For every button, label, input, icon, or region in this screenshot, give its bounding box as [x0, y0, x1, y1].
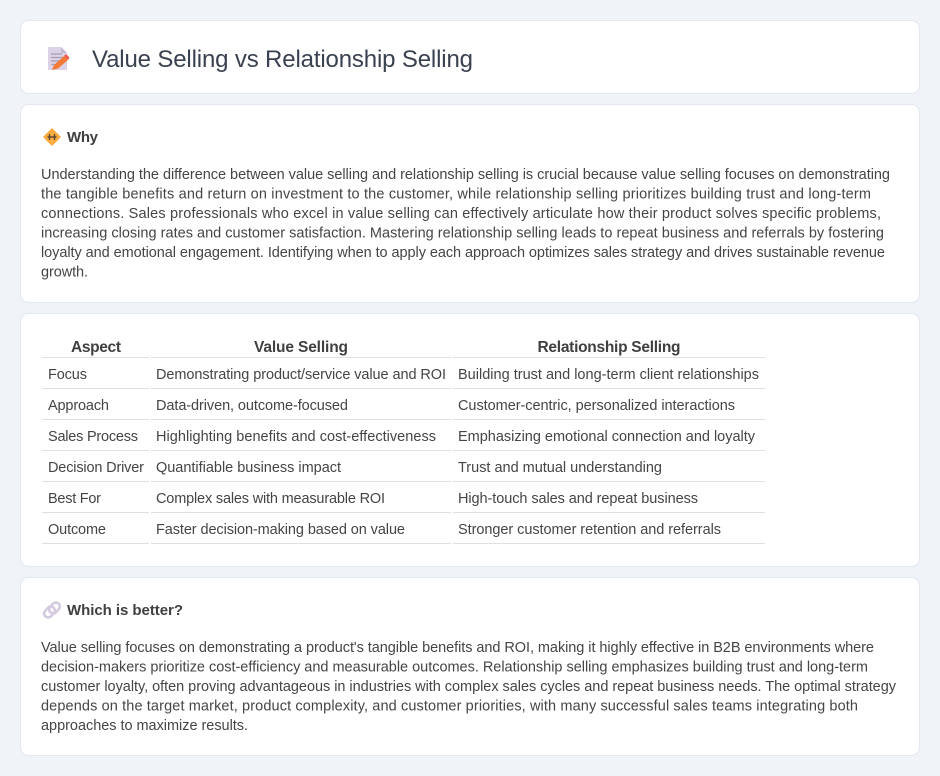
text block: why paragraph: the tangible benefits and return on investment to the customer, while relationship selling prioritizes building trust and long-term	[41, 186, 871, 202]
table row: focus	[48, 367, 759, 383]
table header	[71, 339, 680, 356]
heading: why: Why	[67, 129, 99, 146]
text block: which is better paragraph: approaches to maximize results.	[41, 718, 248, 734]
table row: best for: Best For	[48, 491, 101, 507]
text block: which is better paragraph	[41, 640, 897, 734]
panel: title header	[20, 20, 920, 94]
table header: Value Selling	[254, 339, 348, 356]
text block: which is better paragraph: customer loyalty, often proving advantageous in industries with complex sales cycles and repeat business needs. The optimal strategy	[41, 679, 897, 695]
table row: best for: Complex sales with measurable ROI	[156, 491, 385, 507]
panel: comparison table	[20, 314, 920, 566]
table row: sales process	[48, 429, 756, 445]
table row: approach	[48, 398, 735, 414]
text block: why paragraph: Understanding the difference between value selling and relationship selling is crucial because value selling focuses on demonstrating	[41, 167, 890, 183]
table row: focus: Focus	[48, 367, 87, 383]
text block: why paragraph: growth.	[41, 264, 88, 280]
text block: which is better paragraph: Value selling focuses on demonstrating a product's tangible benefits and ROI, making it highly effective in B2B environments where	[41, 640, 874, 656]
table row: sales process: Sales Process	[48, 429, 138, 445]
panel: why	[20, 104, 920, 302]
table row: outcome	[48, 522, 721, 538]
table header: Relationship Selling	[538, 339, 680, 356]
table row: approach: Data-driven, outcome-focused	[156, 398, 348, 414]
heading: which is better: Which is better?	[67, 602, 183, 619]
panel: which is better	[20, 578, 920, 756]
text block: why paragraph: loyalty and emotional engagement. Identifying when to apply each approach optimizes sales strategy and drives sustainable revenue	[41, 245, 885, 261]
text block: which is better paragraph: depends on the target market, product complexity, and customer priorities, with many successful sales teams integrating both	[41, 698, 858, 714]
title: Value Selling vs Relationship Selling	[92, 46, 473, 73]
table row: outcome: Stronger customer retention and referrals	[458, 522, 721, 538]
text block: why paragraph: increasing closing rates and customer satisfaction. Mastering relationship selling leads to repeat business and referrals by fostering	[41, 226, 884, 242]
table row: sales process: Emphasizing emotional connection and loyalty	[458, 429, 756, 445]
table row: decision driver	[48, 460, 662, 476]
table row: outcome: Outcome	[48, 522, 106, 538]
icon: document with pencil	[48, 47, 70, 70]
table row: outcome: Faster decision-making based on value	[156, 522, 405, 538]
table row: approach: Approach	[48, 398, 109, 414]
table row: approach: Customer-centric, personalized interactions	[458, 398, 735, 414]
text block: why paragraph	[41, 167, 890, 280]
text block: why paragraph: connections. Sales professionals who excel in value selling can effectively articulate how their product solves specific problems,	[41, 206, 881, 222]
table row: best for	[48, 491, 698, 507]
table row: decision driver: Decision Driver	[48, 460, 144, 476]
icon: chain link	[43, 601, 61, 619]
table row: focus: Building trust and long-term client relationships	[458, 367, 759, 383]
table row: best for: High-touch sales and repeat business	[458, 491, 698, 507]
text block: which is better paragraph: decision-makers prioritize cost-efficiency and measurable outcomes. Relationship selling emphasizes building trust and long-term	[41, 660, 868, 676]
icon: orange diamond sign	[44, 129, 60, 145]
table row: focus: Demonstrating product/service value and ROI	[156, 367, 446, 383]
table row: decision driver: Trust and mutual understanding	[458, 460, 662, 476]
table header: Aspect	[71, 339, 121, 356]
table row: sales process: Highlighting benefits and cost-effectiveness	[156, 429, 436, 445]
table row: decision driver: Quantifiable business impact	[156, 460, 341, 476]
